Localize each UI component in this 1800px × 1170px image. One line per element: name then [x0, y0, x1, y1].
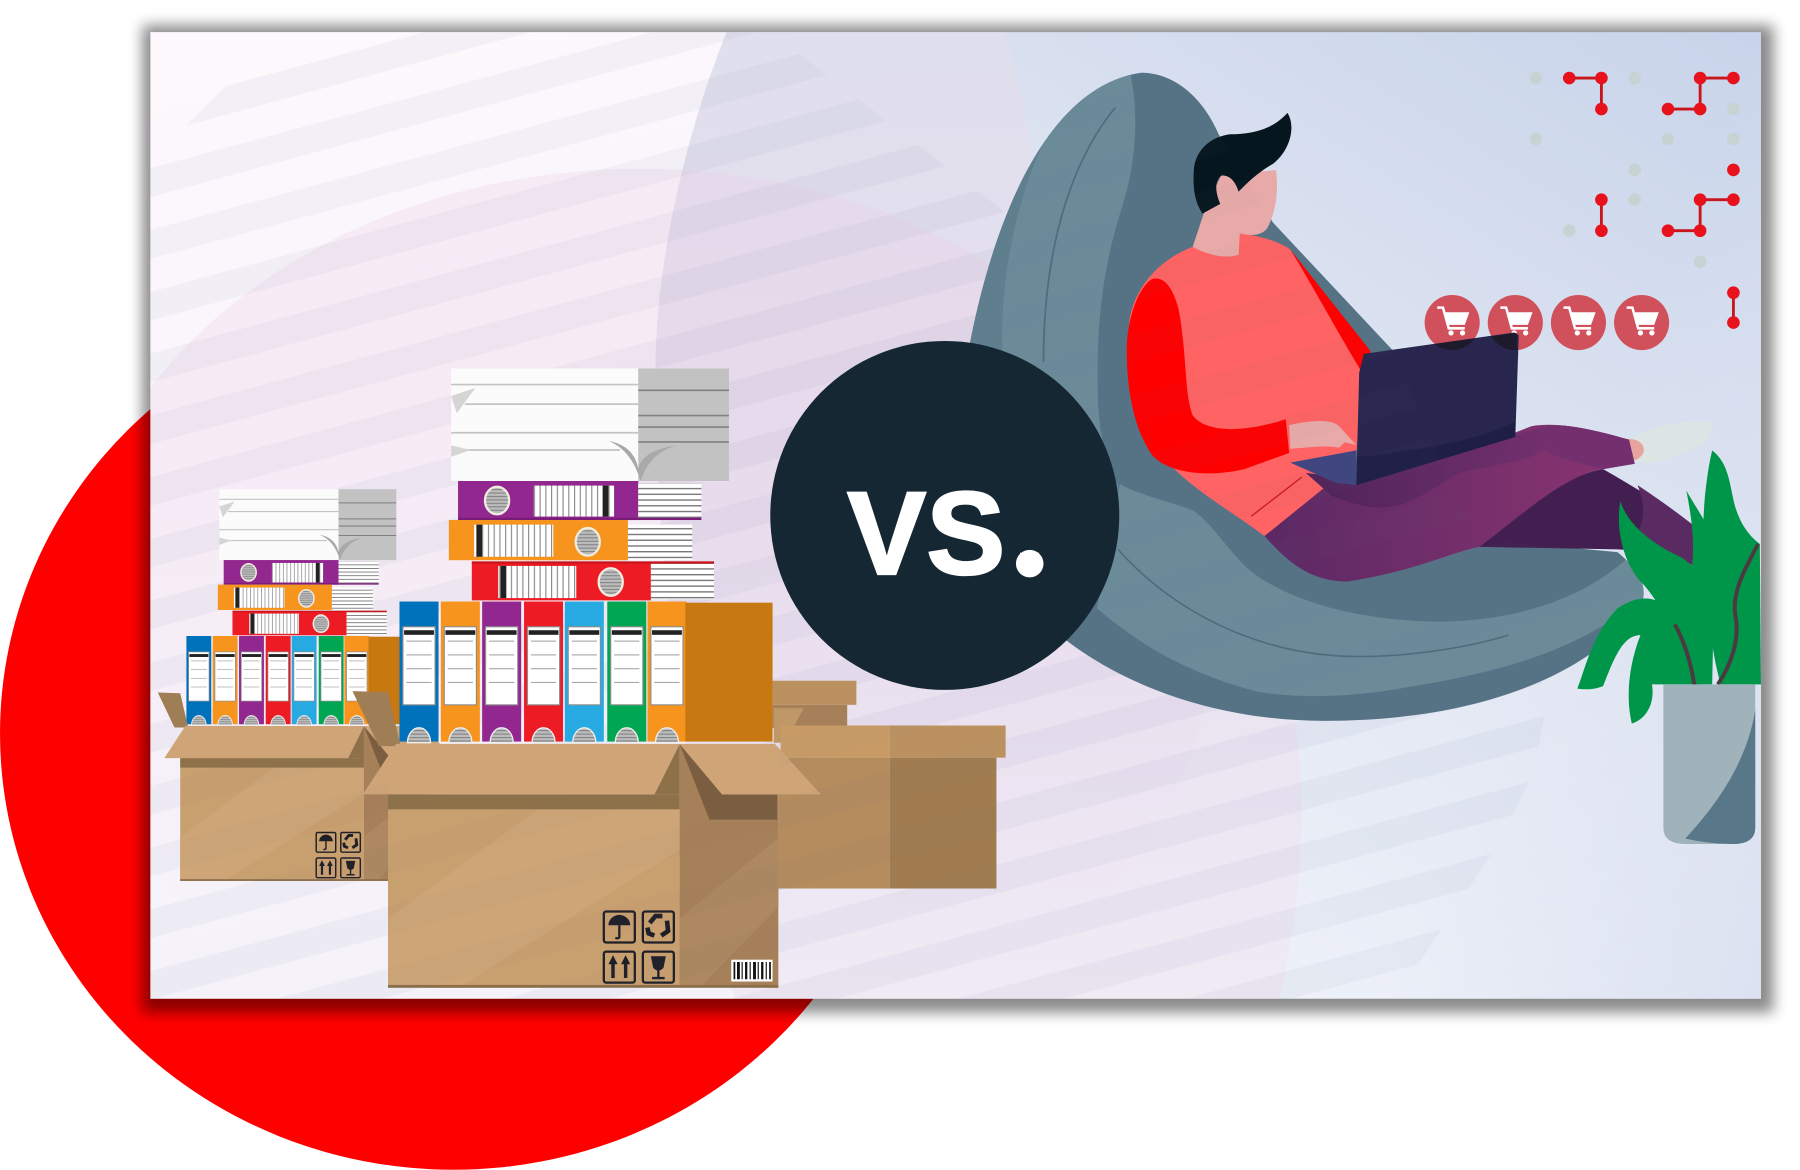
shopping cart badges — [1425, 295, 1669, 350]
large open cardboard box with handling icons — [352, 691, 821, 988]
faint stripes over boxes and chair — [150, 32, 1761, 999]
right sleeve edge — [1290, 249, 1371, 378]
hair — [1194, 113, 1291, 214]
back leg — [1474, 469, 1715, 582]
person reclining with laptop — [1127, 113, 1715, 582]
small pile: binders and paper in open box — [158, 489, 453, 881]
hand — [1289, 421, 1356, 449]
neck and face — [1193, 170, 1277, 257]
large pile: binders and paper stack — [399, 368, 773, 743]
vs badge — [770, 341, 1119, 690]
shoe and foot — [1626, 421, 1711, 463]
closed cardboard boxes at the back — [773, 681, 1006, 889]
decorative network nodes — [1530, 72, 1740, 329]
icon: barcode — [731, 960, 773, 982]
laptop — [1290, 332, 1519, 485]
sleeve — [1127, 279, 1289, 473]
bean bag chair — [934, 67, 1644, 721]
vs badge: VS. — [847, 466, 1046, 600]
plant leaves — [1577, 450, 1761, 723]
pot — [1663, 684, 1755, 844]
front thigh and trousers — [1264, 425, 1635, 582]
sweater — [1128, 233, 1362, 536]
potted plant — [1577, 450, 1761, 844]
plant stems — [1675, 544, 1758, 690]
laptop overlap on cart badges — [1435, 332, 1517, 350]
red background circle — [0, 297, 907, 1170]
